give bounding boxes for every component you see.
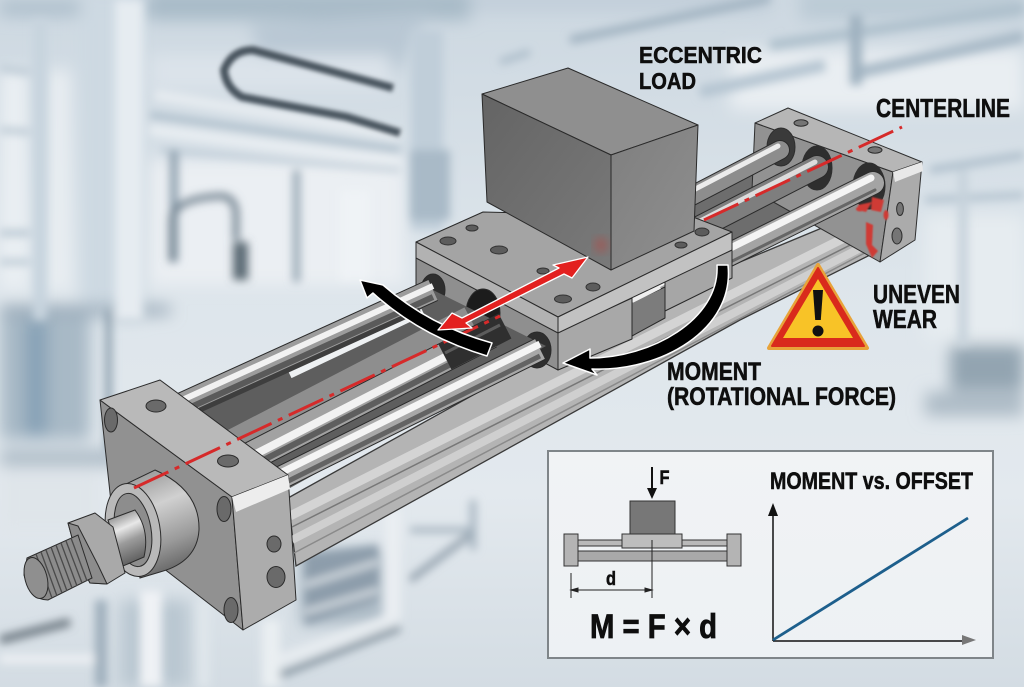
linear actuator illustration [20, 68, 923, 630]
piston rod boss [98, 470, 199, 581]
threaded rod end [20, 535, 92, 601]
rear end plate [752, 108, 923, 262]
offset dimension [571, 540, 652, 598]
warning triangle icon [769, 265, 867, 348]
carriage bearing holes [421, 274, 551, 368]
force label: F [660, 468, 670, 489]
label: uneven wear: WEAR [873, 304, 937, 334]
formula: M = F × d [590, 608, 717, 646]
carriage front block [558, 298, 632, 370]
force arrowhead [647, 488, 657, 499]
label: eccentric load: ECCENTRIC [639, 42, 762, 68]
red double-headed offset arrow [438, 257, 588, 330]
label: uneven wear: UNEVEN [873, 279, 960, 309]
centerline, front segment [134, 316, 500, 488]
cable chain, blurred [224, 50, 400, 133]
schematic carriage [622, 534, 682, 548]
label: eccentric load: LOAD [639, 68, 696, 94]
dark channel between front rods [190, 290, 546, 488]
back guide rod [180, 286, 433, 412]
light channel [225, 318, 470, 445]
force arrow [651, 467, 653, 490]
base extrusion rail [288, 208, 880, 566]
label: eccentric load [639, 42, 762, 94]
wear marks [856, 197, 888, 258]
label: uneven wear [873, 279, 960, 334]
carriage gap with rod [632, 287, 665, 336]
carriage [416, 212, 732, 370]
schematic rod [578, 540, 727, 546]
line chart: moment vs offset [768, 503, 976, 645]
carriage plate right edge [558, 232, 732, 333]
eccentric load block [482, 68, 698, 270]
piston rod [108, 510, 146, 566]
label: moment [667, 358, 896, 411]
carriage left face [416, 256, 558, 370]
inset panel [548, 451, 993, 658]
rear rod segments [620, 146, 875, 316]
chart title: MOMENT vs. OFFSET [770, 468, 973, 495]
moment arrow, right [563, 265, 728, 375]
front end plate [100, 380, 296, 630]
gap behind the rods [290, 312, 423, 375]
schematic base rail [578, 551, 727, 561]
plate holes [104, 400, 285, 622]
schematic: side view of actuator [564, 467, 741, 598]
carriage mounting holes [440, 225, 709, 303]
central guide rod [240, 325, 505, 472]
rear dark channel between rods [640, 147, 873, 300]
carriage plate left edge [416, 242, 558, 333]
hex nut [68, 513, 125, 584]
schematic load [630, 501, 675, 534]
label: moment: (ROTATIONAL FORCE) [667, 383, 896, 411]
centerline, rear segment [704, 127, 902, 220]
schematic right end plate [727, 534, 741, 566]
carriage top plate [416, 212, 732, 317]
moment arrow, left [360, 280, 492, 356]
schematic left end plate [564, 534, 578, 566]
label: moment: MOMENT [667, 358, 761, 386]
front guide rod [240, 344, 540, 505]
offset label: d [606, 569, 616, 590]
carriage rear block [665, 250, 732, 311]
